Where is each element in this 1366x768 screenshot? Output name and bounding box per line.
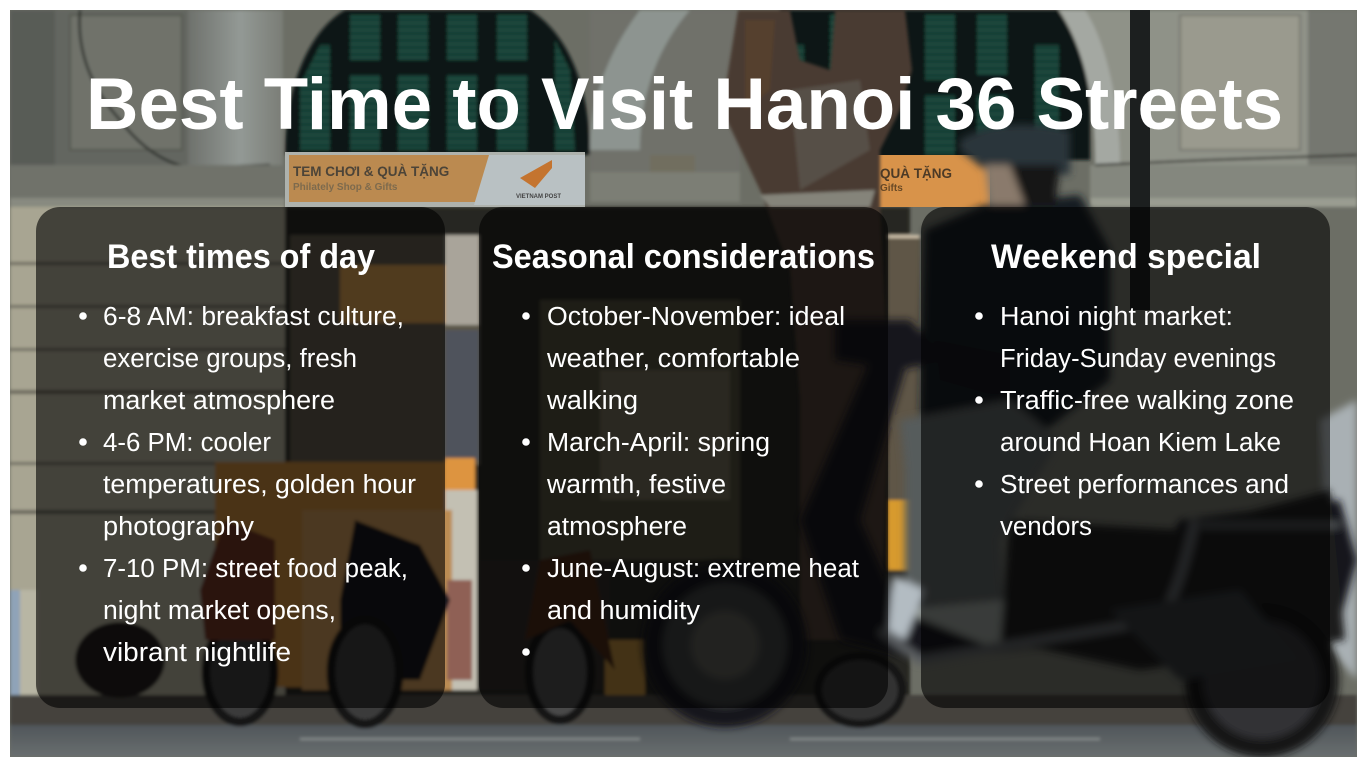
list: best times of day: photography (103, 513, 254, 541)
list: best times of day: exercise groups, fresh (103, 345, 357, 373)
list: weekend special: around Hoan Kiem Lake (1000, 429, 1281, 457)
left wall, lower (10, 207, 290, 697)
list: weekend special: Hanoi night market: (1000, 303, 1233, 331)
list: weekend special: Friday-Sunday evenings (1000, 345, 1276, 373)
heading: weekend special: Weekend special (991, 238, 1261, 276)
tree trunk (722, 10, 912, 640)
upper wall, left (56, 12, 186, 163)
street signs: Philately Shop & Gifts (293, 182, 398, 193)
list: seasonal considerations: walking (546, 387, 638, 415)
street signs: QUÀ TẶNG (880, 166, 952, 181)
list: best times of day: temperatures, golden hour (103, 471, 417, 499)
main street road (10, 725, 1357, 757)
heading: best times of day: Best times of day (107, 238, 375, 276)
panel: best times of day (36, 207, 445, 708)
list: best times of day: 4-6 PM: cooler (103, 429, 272, 457)
list: seasonal considerations: June-August: extreme heat (547, 555, 859, 583)
heading: seasonal considerations: Seasonal considerations (492, 238, 875, 276)
lamp pole (1130, 10, 1150, 310)
left arch with green shutters (285, 10, 590, 155)
title: Best Time to Visit Hanoi 36 Streets (86, 64, 1283, 145)
middle wall between arches (586, 106, 592, 156)
street signs: Gifts (880, 183, 903, 194)
list: weekend special: Street performances and (1000, 471, 1289, 499)
upper wall, right (1056, 10, 1310, 166)
list: seasonal considerations: atmosphere (547, 513, 687, 541)
list: seasonal considerations: March-April: spring (547, 429, 770, 457)
list: seasonal considerations: and humidity (547, 597, 700, 625)
list: seasonal considerations: weather, comfortable (546, 345, 800, 373)
shop interior (285, 207, 910, 697)
blurred scooter rider (653, 124, 1357, 748)
street signs (285, 152, 990, 207)
list: best times of day: vibrant nightlife (103, 639, 291, 667)
list: best times of day (79, 303, 417, 667)
parked motorbikes (75, 520, 902, 724)
right background car (1320, 400, 1357, 680)
list: weekend special (975, 303, 1294, 541)
list: best times of day: market atmosphere (103, 387, 335, 415)
ledge (10, 163, 282, 172)
list: best times of day: 7-10 PM: street food peak, (103, 555, 408, 583)
panel: seasonal considerations (479, 207, 888, 708)
street signs: VIETNAM POST (516, 194, 561, 200)
street signs: TEM CHƠI & QUÀ TẶNG (293, 164, 449, 179)
list: seasonal considerations (522, 303, 859, 656)
list: best times of day: 6-8 AM: breakfast culture, (103, 303, 404, 331)
panel: weekend special (921, 207, 1330, 708)
right arch with green shutters (780, 10, 1090, 160)
list: weekend special: vendors (1000, 513, 1092, 541)
list: seasonal considerations: October-November: ideal (547, 303, 845, 331)
list: best times of day: night market opens, (103, 597, 336, 625)
list: weekend special: Traffic-free walking zone (1000, 387, 1294, 415)
list: seasonal considerations: warmth, festive (546, 471, 726, 499)
